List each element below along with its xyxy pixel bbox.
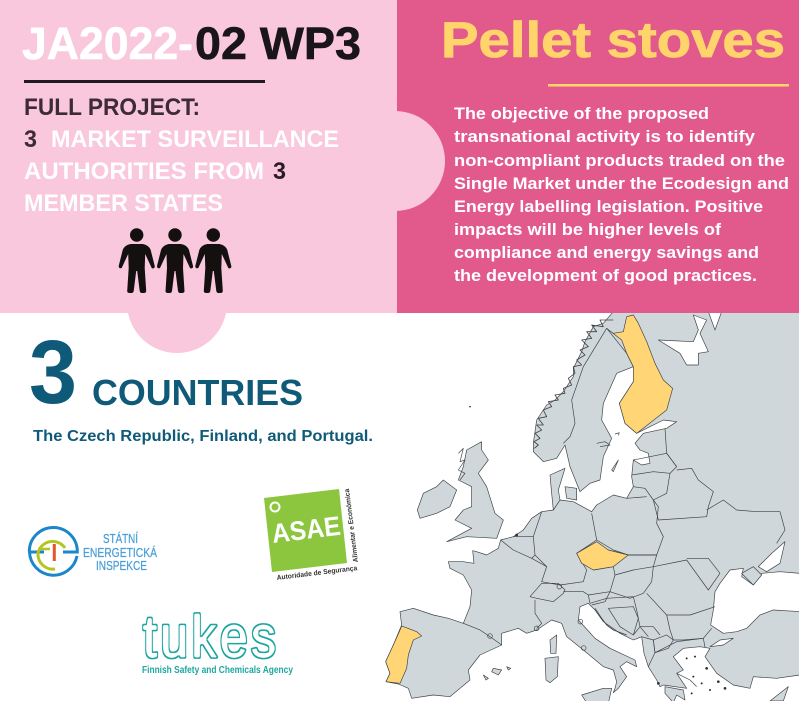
text block: objective: impacts will be higher levels of: [454, 221, 722, 239]
panel: full project (light pink with tabs): [0, 0, 445, 353]
icon: three people: [119, 228, 231, 293]
logo: ASAE: Autoridade de Segurança: [276, 565, 358, 582]
logo: Státní energetická inspekce: [29, 527, 158, 575]
text block: objective: the development of good practices.: [454, 267, 757, 285]
heading: 3 countries: [29, 323, 303, 423]
map of Europe: [0, 310, 799, 701]
text block: objective: transnational activity is to identify: [454, 128, 756, 146]
logo: ASAE: Alimentar e Económica: [344, 488, 360, 563]
text block: objective: compliance and energy savings and: [454, 244, 759, 262]
text block: objective: Single Market under the Ecodesign and: [454, 175, 789, 193]
Norway coast fringe: [534, 320, 613, 448]
heading: Pellet stoves: Pellet stoves: [441, 12, 785, 68]
heading underline: [24, 80, 265, 83]
panel: objective (dark pink): [397, 0, 799, 313]
text block: full project: FULL PROJECT:: [24, 94, 200, 121]
title: JA2022-02 WP3: 02 WP3: [195, 18, 361, 69]
Scottish isles fringe: [458, 448, 465, 480]
text block: objective: The objective of the proposed: [454, 105, 709, 123]
text block: full project: 3: [24, 126, 37, 153]
logo: tukes: Finnish Safety and Chemicals Agency: [142, 664, 293, 676]
logo: Státní energetická inspekce: ENERGETICKÁ: [83, 545, 158, 560]
logo: tukes: tukes: [143, 603, 276, 670]
text block: full project: MARKET SURVEILLANCE: [51, 126, 339, 153]
text block: full project: MEMBER STATES: [24, 190, 223, 217]
heading underline right: [548, 84, 789, 86]
title: JA2022-02 WP3: JA2022-: [22, 18, 193, 69]
logo: Státní energetická inspekce: STÁTNÍ: [103, 531, 138, 546]
text block: full project: [24, 94, 339, 217]
logo: ASAE: [264, 488, 360, 582]
text block: country list: The Czech Republic, Finland, and Portugal.: [33, 428, 373, 445]
text block: objective: Energy labelling legislation. Positive: [454, 198, 763, 216]
Aegean islands: [469, 406, 726, 694]
heading: 3 countries: 3: [29, 323, 77, 423]
heading: 3 countries: COUNTRIES: [92, 372, 303, 413]
text block: full project: 3: [273, 158, 286, 185]
logo: ASAE: ASAE: [270, 511, 342, 549]
title: JA2022-02 WP3: [22, 18, 361, 69]
logo: Státní energetická inspekce: INSPEKCE: [96, 559, 147, 573]
text block: full project: AUTHORITIES FROM: [24, 158, 264, 185]
text block: objective: [454, 105, 789, 285]
text block: objective: non-compliant products traded on the: [454, 152, 785, 170]
